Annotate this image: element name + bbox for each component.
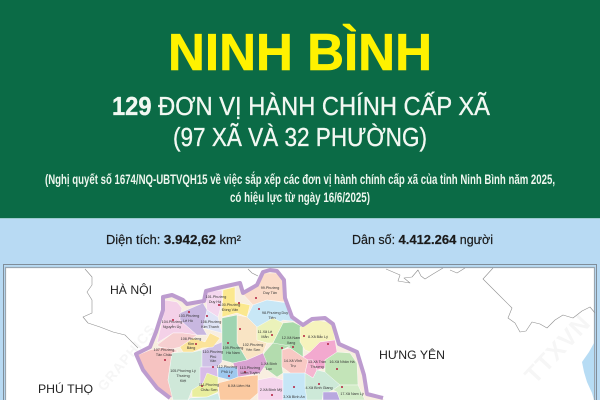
commune labels: 17.Xã Nam Lý <box>340 392 364 396</box>
commune labels: Phủ Lý <box>221 370 233 374</box>
heading: number of units <box>112 91 491 152</box>
text block: resolution note: có hiệu lực từ ngày 16/6/2025) <box>230 190 370 205</box>
commune labels: 112.Phường <box>217 365 237 369</box>
commune labels: Liêm Tuyền <box>240 371 260 375</box>
heading: number of units: (97 XÃ VÀ 32 PHƯỜNG) <box>173 122 427 152</box>
commune labels: 99.Phường <box>261 286 279 290</box>
commune labels: 107.Phường <box>154 348 174 352</box>
stat: area: Diện tích: 3.942,62 km² <box>106 232 241 247</box>
commune labels: Châu Sơn <box>201 388 217 392</box>
commune labels: Kim <box>188 342 194 346</box>
commune labels: 4.Xã Bình Giang <box>305 386 333 390</box>
commune labels: 110.Phường <box>203 350 223 354</box>
commune labels: 109.Phường <box>223 346 243 350</box>
commune labels: 108.Phường <box>181 337 201 341</box>
panel: map frame <box>4 264 596 400</box>
commune labels: 105.Phường Lý <box>170 369 196 373</box>
commune labels: 12.Xã Nam <box>282 336 300 340</box>
commune labels: Thường <box>176 374 190 378</box>
commune labels: Đồng Văn <box>222 308 238 312</box>
commune labels: Duy Hà <box>209 300 222 304</box>
commune labels: Duy Tân <box>263 291 277 295</box>
commune labels <box>154 286 364 399</box>
commune labels: 11.Xã Lê <box>258 330 272 334</box>
stat: population: Dân số: 4.412.264 người <box>352 232 493 247</box>
province outline <box>136 270 383 398</box>
commune labels: 98.Phường Duy <box>262 311 288 315</box>
commune labels: 100.Phường <box>220 303 240 307</box>
province fill <box>136 270 385 400</box>
commune labels: 111.Phường <box>199 383 219 387</box>
commune labels: Kiệt <box>180 379 186 383</box>
commune labels: Hà Nam <box>226 351 240 355</box>
commune labels: 113.Phường <box>240 366 260 370</box>
commune labels: 103.Phường <box>179 314 199 318</box>
commune labels: 6.Xã Liêm Hà <box>228 384 251 388</box>
commune labels: 16.Xã Nhân Hà <box>329 360 356 364</box>
commune labels: Nguyễn Úy <box>163 324 181 329</box>
commune labels: Bảng <box>187 346 195 350</box>
commune labels: 14.Xã Vĩnh <box>284 359 302 363</box>
label: Hưng Yên: HƯNG YÊN <box>379 347 445 362</box>
title: NINH BÌNH <box>168 24 432 82</box>
watermark <box>94 309 596 394</box>
commune labels: 101.Phường <box>206 295 226 299</box>
commune labels: Thương <box>310 365 324 369</box>
commune labels: Xang <box>287 341 295 345</box>
commune labels: Kim Thanh <box>201 325 219 329</box>
commune labels: Vân <box>210 359 216 363</box>
panel: stats bar <box>0 218 600 400</box>
commune labels: 1.Xã Bình <box>261 362 277 366</box>
commune labels: Yên Sơn <box>246 348 260 352</box>
commune polygons <box>138 273 365 400</box>
map: Ninh Bình communes <box>136 270 385 400</box>
commune labels: 13.Xã Trần <box>308 360 326 364</box>
commune centre markers <box>164 297 343 396</box>
label: Hà Nội: HÀ NỘI <box>110 282 152 297</box>
commune labels: Lê Hồ <box>183 319 193 323</box>
province borders <box>83 268 595 348</box>
commune labels: Tân Châu <box>156 353 172 357</box>
commune labels: Tiên <box>268 316 276 320</box>
commune labels: 102.Phường <box>243 343 263 347</box>
commune labels: 104.Phường <box>162 320 182 324</box>
commune labels: Mẫn <box>261 334 269 339</box>
heading: number of units: 129 ĐƠN VỊ HÀNH CHÍNH CẤP XÃ <box>112 91 491 121</box>
sea area <box>582 343 594 400</box>
watermark: TTXVN <box>520 309 596 389</box>
commune labels: Trụ <box>290 364 296 368</box>
commune labels: 106.Phường <box>201 320 221 324</box>
commune labels: Lục <box>266 367 272 371</box>
commune labels: 3.Xã Bình An <box>283 395 305 399</box>
label: Phú Thọ: PHÚ THỌ <box>38 381 93 396</box>
watermark: GRAPHICS <box>94 321 159 394</box>
commune labels: 8.Xã Bắc Lý <box>308 334 328 339</box>
commune labels: Phù <box>210 355 216 359</box>
text block: resolution note <box>45 172 555 205</box>
commune labels: 2.Xã Bình Mỹ <box>260 388 282 392</box>
